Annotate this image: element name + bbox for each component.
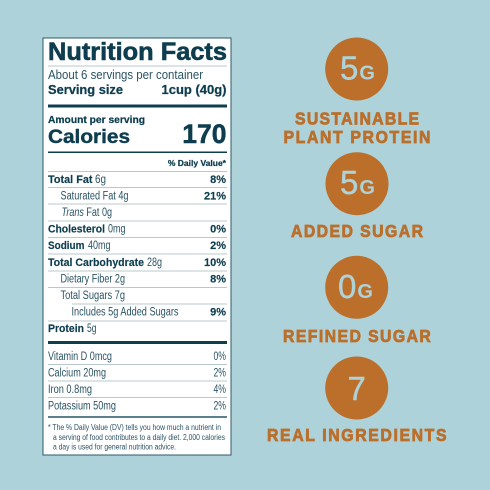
- nutrient rows: 10%: [204, 257, 226, 269]
- vitamin and mineral rows: [48, 351, 227, 412]
- nutrient rows: 40mg: [88, 240, 110, 252]
- badge: 5g added sugar: 5G: [340, 164, 375, 201]
- nutrient rows: 2%: [210, 240, 226, 252]
- nutrient rows: Saturated Fat 4g: [60, 190, 128, 202]
- text: calories: 170: [182, 119, 226, 149]
- nutrient rows: 8%: [210, 274, 226, 286]
- vitamin and mineral rows: Vitamin D 0mcg: [48, 351, 112, 363]
- nutrient rows: 0%: [210, 224, 226, 236]
- text: serving size: Serving size: [48, 83, 123, 97]
- text: serving size: 1cup (40g): [162, 83, 226, 97]
- badge: 5g added sugar: ADDED SUGAR: [291, 221, 423, 241]
- nutrient rows: Total Fat: [48, 174, 93, 186]
- vitamin and mineral rows: 2%: [214, 368, 226, 380]
- vitamin and mineral rows: Potassium 50mg: [48, 400, 116, 412]
- nutrient rows: Dietary Fiber 2g: [60, 274, 125, 286]
- nutrient rows: Protein: [48, 323, 84, 335]
- footnote: * The % Daily Value (DV) tells you how much a nutrient in: [48, 423, 221, 432]
- vitamin and mineral rows: 0%: [214, 351, 226, 363]
- vitamin and mineral rows: 4%: [214, 384, 226, 396]
- badge: 5g sustainable plant protein: PLANT PROTEIN: [284, 127, 430, 147]
- text: percent daily value header: % Daily Value*: [168, 158, 227, 168]
- nutrient rows: 0mg: [108, 224, 126, 236]
- text: calories: Calories: [48, 127, 130, 148]
- vitamin and mineral rows: 2%: [214, 400, 226, 412]
- badge: 5g added sugar: [291, 152, 423, 241]
- nutrient rows: 5g: [87, 323, 96, 335]
- badge: 5g sustainable plant protein: [284, 38, 430, 147]
- text: calories: [48, 119, 226, 149]
- nutrient rows: Total Sugars 7g: [60, 290, 125, 302]
- nutrient rows: 6g: [95, 174, 106, 186]
- nutrient rows: 9%: [210, 306, 226, 318]
- nutrient rows: 21%: [204, 190, 226, 202]
- nutrient rows: Includes 5g Added Sugars: [72, 306, 179, 318]
- badge: 5g sustainable plant protein: SUSTAINABLE: [295, 109, 419, 129]
- vitamin and mineral rows: Calcium 20mg: [48, 368, 106, 380]
- badge: 0g refined sugar: 0G: [338, 268, 373, 305]
- footnote: a serving of food contributes to a daily diet. 2,000 calories: [53, 433, 225, 442]
- nutrient rows: 8%: [210, 174, 226, 186]
- nutrient rows: Sodium: [48, 240, 85, 252]
- nutrient rows: 28g: [147, 257, 162, 269]
- badge: 7 real ingredients: 7: [348, 370, 366, 407]
- badge: 7 real ingredients: REAL INGREDIENTS: [267, 425, 447, 445]
- heading: Nutrition Facts: Nutrition Facts: [48, 38, 227, 66]
- text: servings per container: About 6 servings per container: [48, 68, 203, 82]
- footnote: a day is used for general nutrition advice.: [53, 442, 176, 452]
- badge: 5g sustainable plant protein: 5G: [340, 50, 375, 86]
- nutrient rows: Trans Fat 0g: [62, 207, 112, 219]
- footnote: [48, 423, 225, 452]
- nutrient rows: Cholesterol: [48, 224, 105, 236]
- nutrient rows: Total Carbohydrate: [48, 257, 144, 269]
- vitamin and mineral rows: Iron 0.8mg: [48, 384, 92, 396]
- nutrient rows: [48, 174, 227, 335]
- panel: nutrition facts label: [43, 38, 231, 455]
- badge: 0g refined sugar: [283, 256, 431, 346]
- text: amount per serving: Amount per serving: [48, 114, 145, 126]
- badge: 0g refined sugar: REFINED SUGAR: [283, 326, 431, 346]
- text: serving size: [48, 83, 226, 97]
- badge: 7 real ingredients: [267, 356, 447, 445]
